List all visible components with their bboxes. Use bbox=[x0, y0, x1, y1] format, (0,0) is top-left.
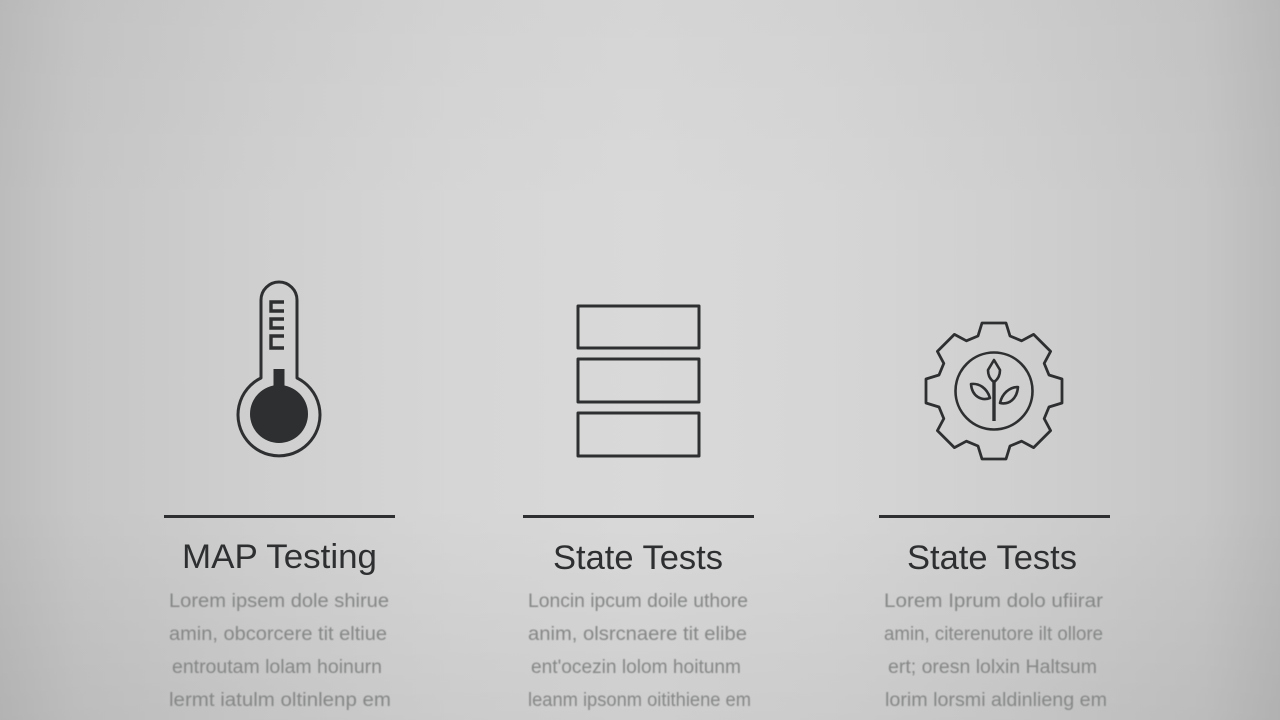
divider: State Tests centre bbox=[523, 515, 754, 518]
icon: gear with plant bbox=[926, 323, 1062, 459]
text block: State Tests right description: lorim lorsmi aldinlieng em bbox=[885, 690, 1107, 711]
text block: State Tests right description bbox=[884, 591, 1107, 711]
text block: MAP Testing description bbox=[169, 591, 391, 711]
text block: State Tests right description: amin, citerenutore ilt ollore bbox=[884, 624, 1103, 645]
text block: MAP Testing description: lermt iatulm oltinlenp em bbox=[169, 690, 391, 711]
panel: State Tests (centre) bbox=[523, 306, 754, 711]
text block: State Tests right description: ert; oresn lolxin Haltsum bbox=[888, 657, 1097, 678]
heading: State Tests right: State Tests bbox=[907, 539, 1077, 577]
text block: State Tests centre description: ent'ocezin lolom hoitunm bbox=[531, 657, 741, 678]
text block: State Tests centre description: leanm ipsonm oitithiene em bbox=[528, 690, 751, 711]
heading: MAP Testing: MAP Testing bbox=[182, 538, 377, 576]
panel: State Tests (right) bbox=[879, 323, 1110, 711]
divider: MAP Testing bbox=[164, 515, 395, 518]
panel: MAP Testing bbox=[164, 282, 395, 711]
text block: State Tests centre description: anim, olsrcnaere tit elibe bbox=[528, 624, 747, 645]
divider: State Tests right bbox=[879, 515, 1110, 518]
text block: MAP Testing description: amin, obcorcere tit eltiue bbox=[169, 624, 387, 645]
text block: MAP Testing description: Lorem ipsem dole shirue bbox=[169, 591, 389, 612]
icon: stacked layers bbox=[578, 306, 699, 456]
text block: State Tests right description: Lorem Iprum dolo ufiirar bbox=[884, 591, 1104, 612]
text block: MAP Testing description: entroutam lolam hoinurn bbox=[172, 657, 382, 678]
text block: State Tests centre description: Loncin ipcum doile uthore bbox=[528, 591, 748, 612]
text block: State Tests centre description bbox=[528, 591, 751, 711]
heading: State Tests centre: State Tests bbox=[553, 539, 723, 577]
icon: thermometer bbox=[238, 282, 320, 456]
